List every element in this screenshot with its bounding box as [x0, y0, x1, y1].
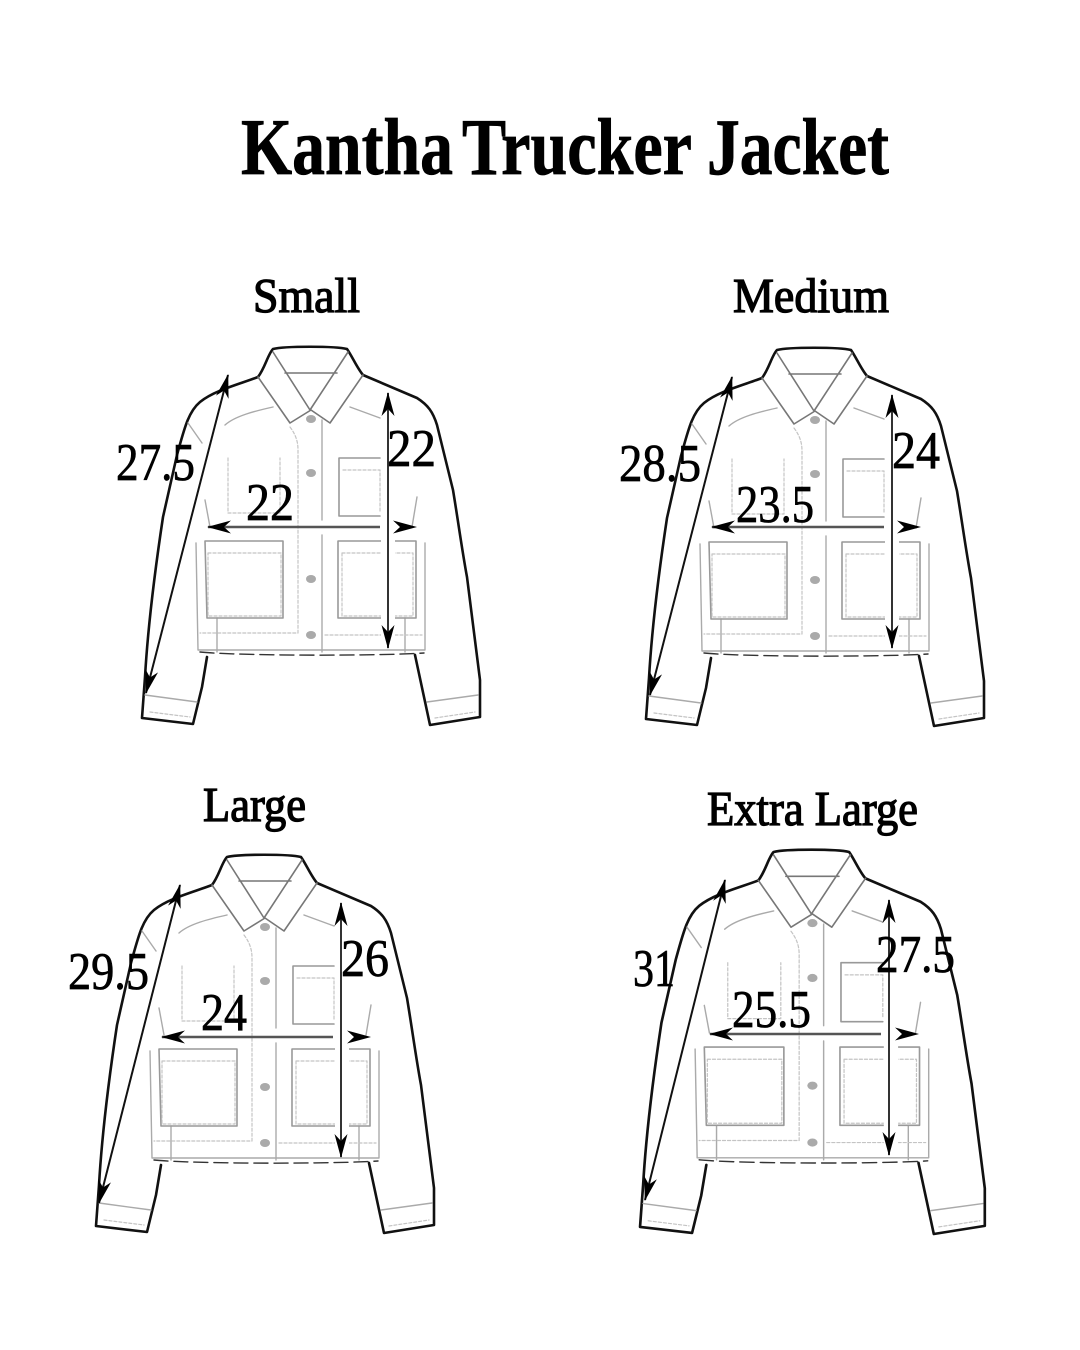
arrow: chest width [208, 526, 416, 528]
title: Jacket [707, 104, 889, 192]
measurement: sleeve: 27.5 [116, 434, 195, 492]
arrow: body length [891, 395, 893, 648]
arrow: sleeve length [99, 885, 180, 1203]
arrow: body length [387, 393, 389, 648]
measurement: sleeve: 29.5 [68, 943, 149, 1001]
title: Trucker [462, 104, 692, 192]
measurement: chest: 25.5 [732, 981, 811, 1039]
measurement: length: 24 [892, 422, 940, 480]
jacket drawing: medium [646, 348, 984, 726]
arrow: body length [888, 900, 890, 1155]
jacket drawing: large [96, 855, 434, 1233]
measurement: chest: 24 [201, 984, 247, 1042]
heading: medium: Medium [733, 268, 889, 323]
measurement: sleeve: 28.5 [619, 435, 701, 493]
arrow: body length [340, 903, 342, 1157]
arrow: sleeve length [645, 880, 725, 1200]
title [241, 104, 889, 192]
measurement: chest: 23.5 [736, 476, 814, 534]
measurement: sleeve: 31 [633, 940, 675, 998]
arrow: sleeve length [146, 375, 228, 693]
panel: small [116, 268, 480, 725]
jacket drawing: small [142, 347, 480, 725]
heading: small: Small [253, 268, 360, 323]
arrow: chest width [710, 1033, 918, 1035]
heading: extra large: Extra Large [707, 781, 918, 836]
title: Kantha [241, 104, 453, 192]
panel: extra large [633, 781, 985, 1234]
measurement: length: 27.5 [876, 926, 955, 984]
measurement: length: 22 [387, 420, 436, 478]
jacket drawing: extra large [640, 850, 985, 1234]
heading: large: Large [203, 777, 306, 832]
measurement: length: 26 [341, 930, 389, 988]
measurement: chest: 22 [246, 474, 294, 532]
arrow: sleeve length [650, 377, 732, 695]
panel: medium [619, 268, 984, 726]
arrow: chest width [712, 526, 920, 528]
arrow: chest width [162, 1036, 370, 1038]
panel: large [68, 777, 434, 1233]
